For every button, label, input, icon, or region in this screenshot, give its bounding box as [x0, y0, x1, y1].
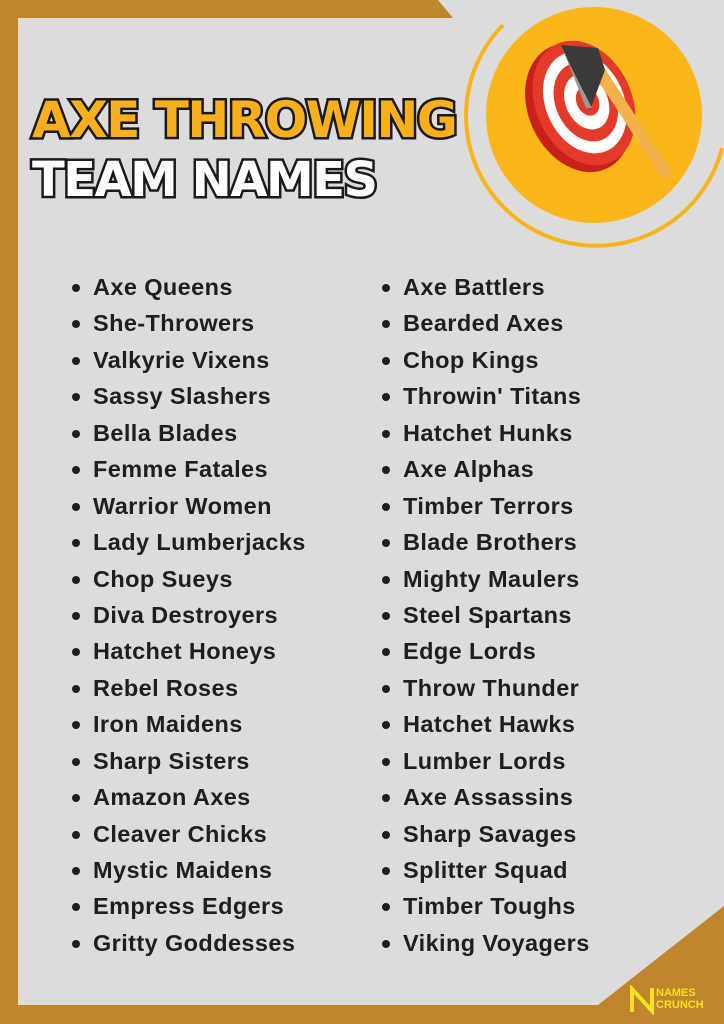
list: right column: Hatchet Hunks [403, 420, 573, 446]
list: right column [382, 274, 590, 956]
list: right column: Chop Kings [403, 347, 539, 373]
list: left column: Axe Queens [93, 274, 233, 300]
list: left column: Empress Edgers [93, 893, 284, 919]
list: left column: Hatchet Honeys [93, 638, 276, 664]
list: right column: Viking Voyagers [403, 930, 590, 956]
list: right column: Splitter Squad [403, 857, 568, 883]
list: right column: Throwin' Titans [403, 383, 581, 409]
list: right column: Bearded Axes [403, 310, 564, 336]
title: AXE THROWING [32, 91, 456, 149]
title [28, 91, 457, 208]
list: right column: Axe Battlers [403, 274, 545, 300]
list: left column: Mystic Maidens [93, 857, 272, 883]
list: left column: Valkyrie Vixens [93, 347, 270, 373]
list: left column: Lady Lumberjacks [93, 529, 306, 555]
list: right column: Edge Lords [403, 638, 536, 664]
list: left column: Diva Destroyers [93, 602, 278, 628]
list: left column: Warrior Women [93, 493, 272, 519]
list: right column: Throw Thunder [403, 675, 579, 701]
list: left column: Iron Maidens [93, 711, 243, 737]
list: left column [72, 274, 306, 956]
list: right column: Axe Assassins [403, 784, 573, 810]
list: right column: Blade Brothers [403, 529, 577, 555]
logo [630, 985, 704, 1015]
list: right column: Sharp Savages [403, 821, 577, 847]
list: left column: Rebel Roses [93, 675, 238, 701]
list: right column: Mighty Maulers [403, 566, 580, 592]
list: right column: Timber Terrors [403, 493, 574, 519]
list: left column: Sassy Slashers [93, 383, 271, 409]
list: left column: Gritty Goddesses [93, 930, 295, 956]
list: right column: Hatchet Hawks [403, 711, 575, 737]
list: left column: Amazon Axes [93, 784, 251, 810]
list: left column: Cleaver Chicks [93, 821, 267, 847]
list: left column: Sharp Sisters [93, 748, 250, 774]
icon: target with axe [466, 7, 722, 246]
list: left column: Bella Blades [93, 420, 238, 446]
title: TEAM NAMES [32, 152, 377, 208]
logo: NAMES [656, 987, 696, 999]
list: left column: Chop Sueys [93, 566, 233, 592]
list: left column: She-Throwers [93, 310, 254, 336]
list: left column: Femme Fatales [93, 456, 268, 482]
list: right column: Axe Alphas [403, 456, 534, 482]
list: right column: Lumber Lords [403, 748, 566, 774]
list: right column: Timber Toughs [403, 893, 576, 919]
logo: CRUNCH [656, 999, 704, 1011]
list: right column: Steel Spartans [403, 602, 572, 628]
